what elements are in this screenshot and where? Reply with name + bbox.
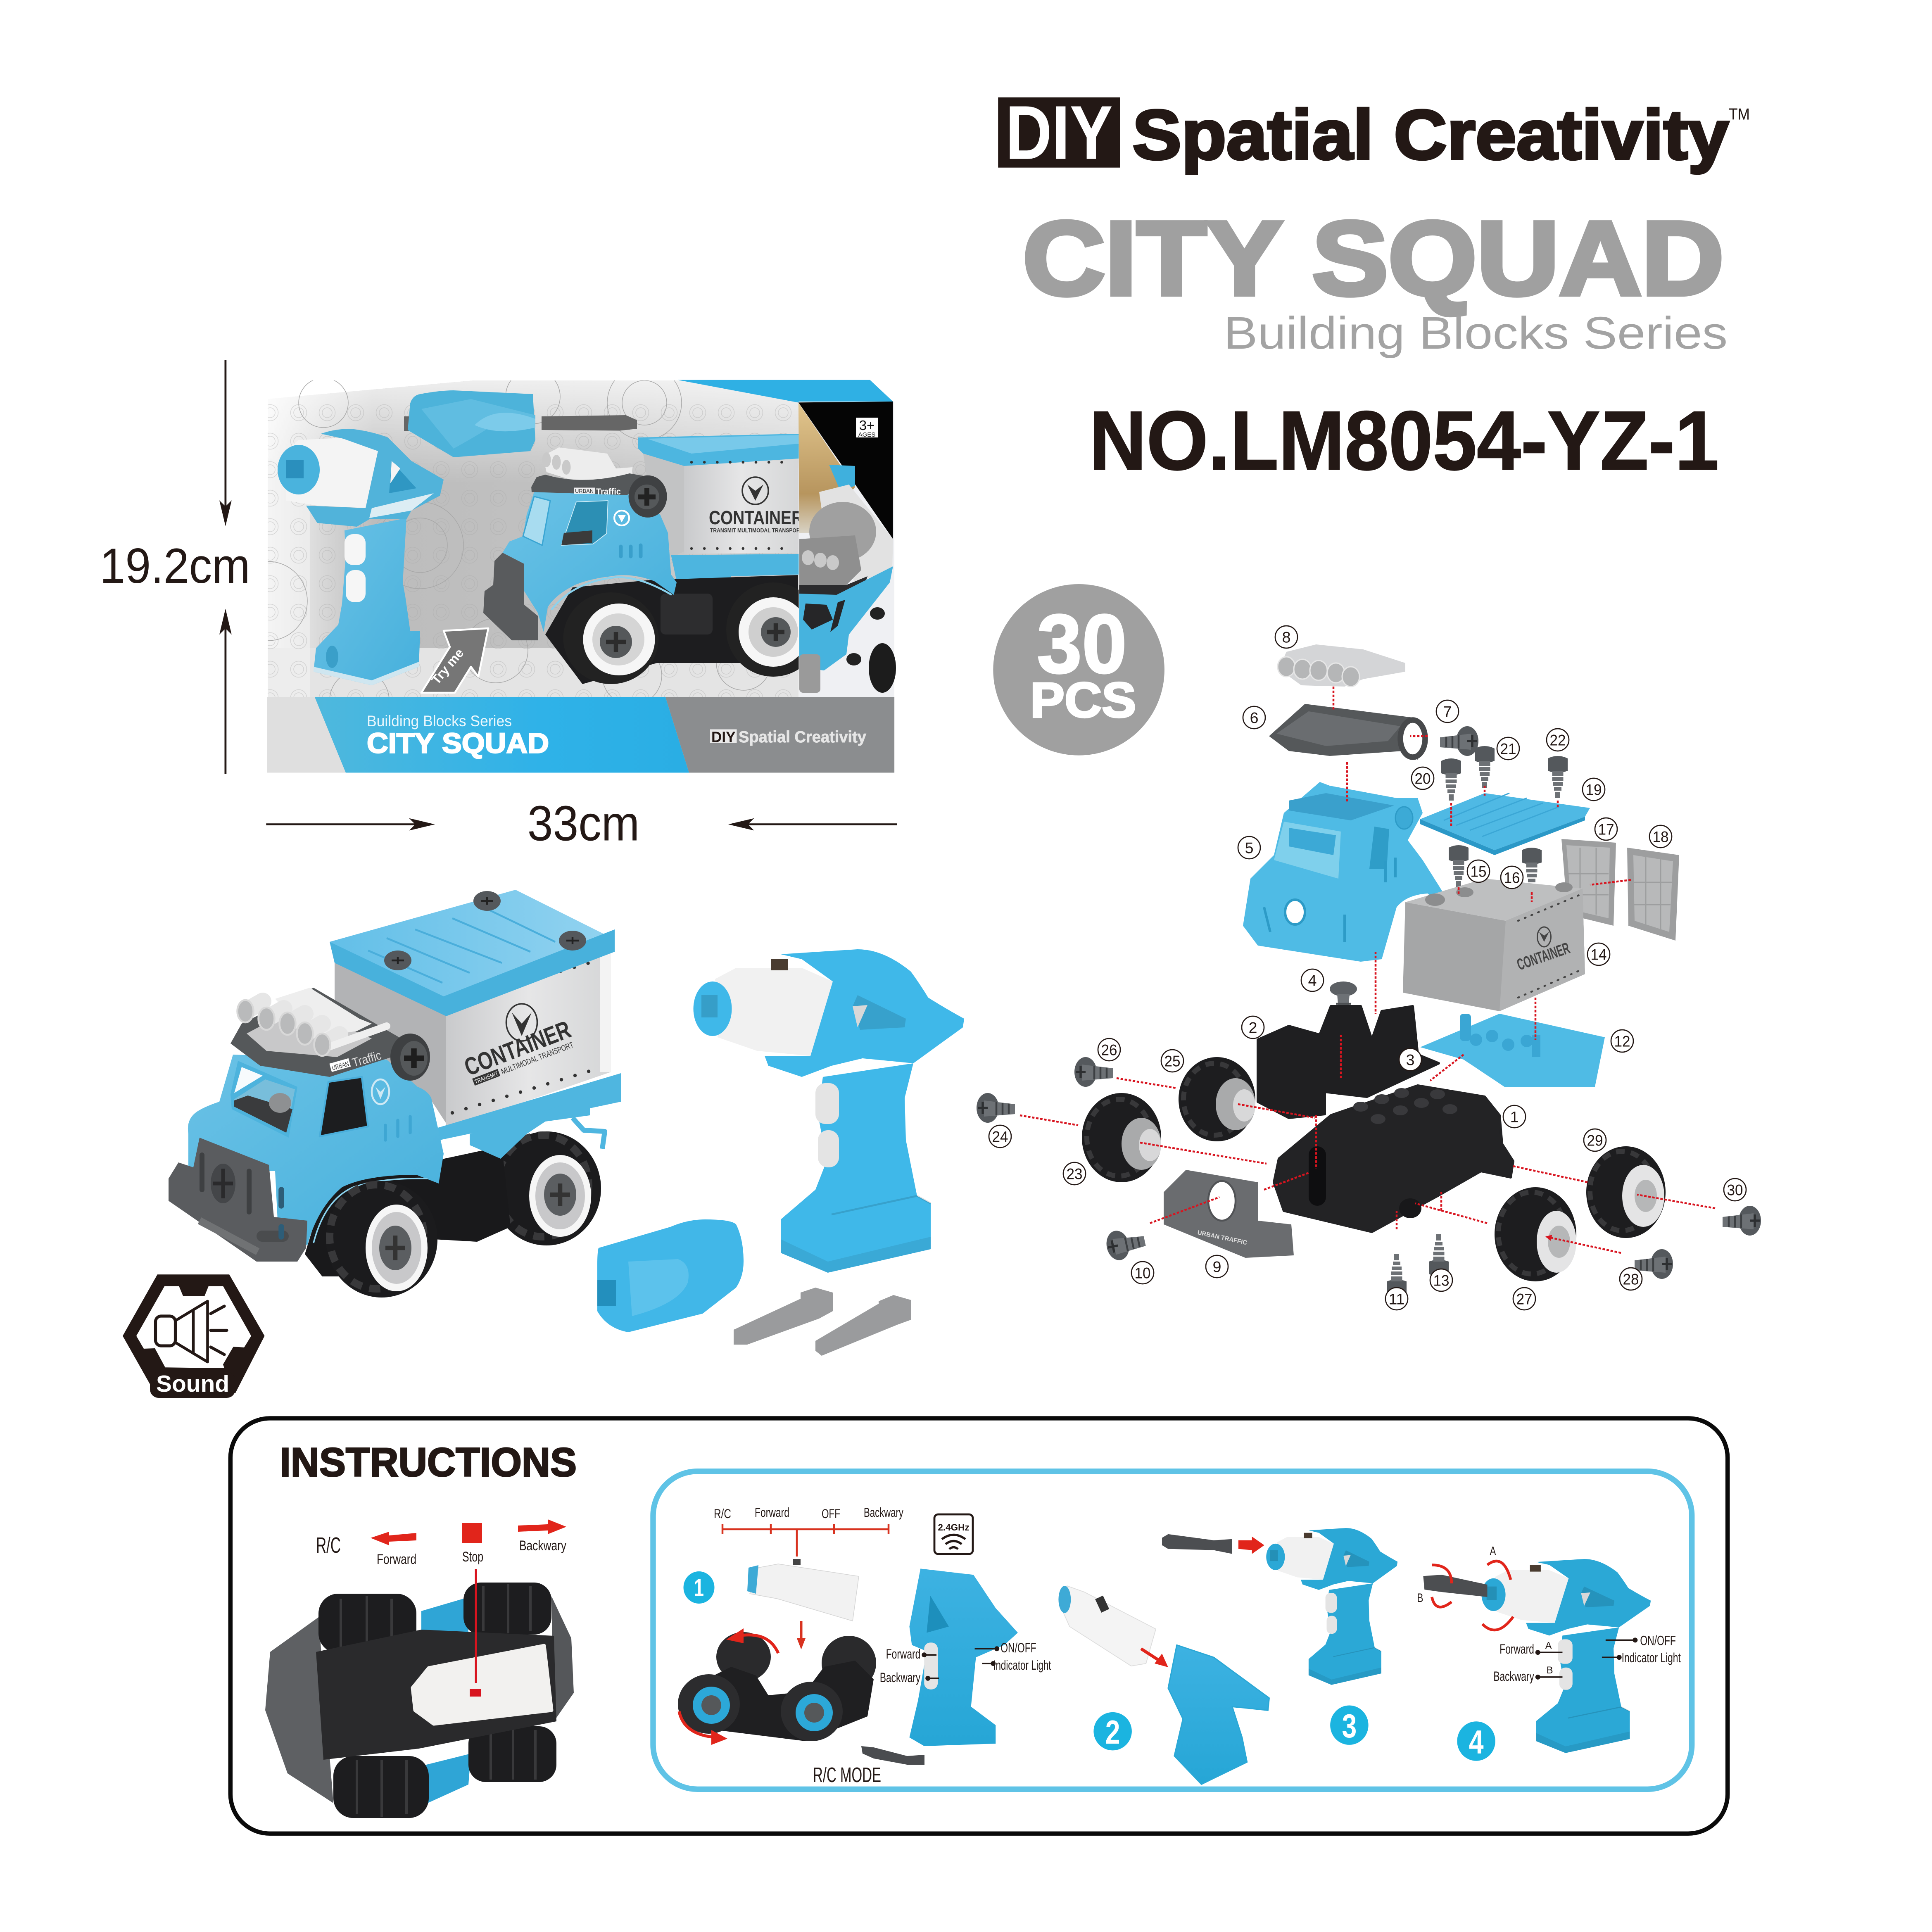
engine pipes	[237, 988, 387, 1056]
age badge: 3+	[859, 418, 875, 433]
step 4 labels: Indicator Light	[1622, 1650, 1681, 1665]
part 11 screw	[1387, 1254, 1407, 1296]
switch selector diagram: OFF	[822, 1506, 840, 1521]
remote labels: ON/OFF	[1000, 1640, 1036, 1655]
step 4: bit and rotation: A	[1490, 1545, 1496, 1558]
sound caption: Sound	[156, 1371, 229, 1397]
part number callouts: 21	[1500, 740, 1516, 758]
part 8 engine	[1278, 644, 1405, 687]
step badge 1: 1	[694, 1574, 704, 1602]
container base	[434, 1073, 621, 1159]
RC car front view	[678, 1632, 876, 1741]
blue box top flap	[678, 380, 893, 402]
part number callouts: 1	[1510, 1108, 1519, 1126]
battery module	[747, 1559, 859, 1621]
step badge 4	[1457, 1721, 1495, 1761]
heading: brand logo	[998, 90, 1750, 176]
part number callouts: 13	[1433, 1272, 1449, 1289]
container logo	[506, 1004, 537, 1041]
part 21 screw	[1475, 746, 1495, 788]
cab	[502, 492, 677, 632]
container right face	[446, 952, 611, 1129]
step badge 3	[1330, 1705, 1369, 1745]
rear wheel	[726, 582, 820, 677]
package toy: truck: URBAN	[575, 488, 594, 494]
part 23 wheel	[1082, 1093, 1161, 1182]
rotation arrows	[679, 1628, 778, 1745]
part 13 screw	[1429, 1234, 1449, 1276]
part 2 seats	[1258, 1006, 1439, 1118]
part number callouts: 11	[1389, 1290, 1404, 1308]
part 22 screw	[1548, 756, 1568, 798]
R/C switch legend: Forward	[377, 1552, 416, 1567]
part 18 panel	[1627, 848, 1679, 941]
headlight studs	[280, 1190, 282, 1237]
remote labels	[880, 1640, 1051, 1685]
part number callouts: 29	[1587, 1132, 1603, 1149]
part number callouts: 17	[1598, 821, 1614, 838]
part number callouts: 2	[1249, 1019, 1257, 1036]
chassis	[545, 575, 798, 684]
remote labels: Indicator Light	[993, 1657, 1051, 1673]
part 4 bolt	[1330, 981, 1357, 1026]
part 28 bolt	[1635, 1249, 1673, 1279]
red pointer line	[475, 1569, 476, 1683]
cross bit	[815, 1295, 911, 1356]
switch selector diagram: Forward	[755, 1505, 789, 1520]
package toy: attachment with screwdriver bit	[404, 390, 637, 457]
series subtitle: Building Blocks Series	[1224, 308, 1728, 359]
drill body without battery	[1168, 1645, 1269, 1784]
cab body	[188, 1055, 444, 1245]
part number callouts: 7	[1443, 703, 1452, 720]
step badge 4: 4	[1469, 1724, 1484, 1761]
visor label: URBAN	[331, 1060, 350, 1072]
container wording	[461, 1015, 577, 1088]
age badge	[856, 418, 878, 438]
black corner panel	[798, 402, 893, 539]
front wheel	[326, 1181, 437, 1298]
step 4 drill	[1481, 1559, 1651, 1753]
package toy: truck: Traffic	[596, 487, 621, 497]
product package box	[228, 366, 896, 772]
badge: 30 PCS: 30	[1037, 597, 1127, 691]
package toy: truck	[483, 434, 820, 684]
DIY logo block: DIY	[1005, 90, 1113, 176]
part number callouts	[989, 626, 1746, 1310]
part number callouts: 9	[1213, 1258, 1221, 1276]
part 15 screw	[1449, 845, 1469, 887]
RC car underside	[265, 1569, 574, 1818]
part 29 wheel	[1586, 1146, 1666, 1238]
part number callouts: 6	[1250, 709, 1258, 727]
remote labels: Forward	[886, 1646, 920, 1661]
visor label: Traffic	[351, 1048, 383, 1070]
part number callouts: 4	[1308, 972, 1317, 989]
part 30 bolt	[1723, 1206, 1761, 1236]
package toy: truck: TRANSMIT MULTIMODAL TRANSPORT	[710, 527, 803, 534]
step 4 labels	[1493, 1633, 1681, 1684]
part 27 wheel	[1495, 1187, 1576, 1281]
visor	[531, 473, 651, 495]
container wording: TRANSMIT	[474, 1070, 499, 1086]
part number callouts: 14	[1590, 946, 1607, 963]
container left face	[335, 960, 450, 1129]
dimension: height: 19.2cm	[100, 539, 250, 594]
panel: steps frame	[653, 1471, 1692, 1789]
container body	[643, 454, 684, 558]
hub bolt	[390, 1034, 430, 1081]
part number callouts: 30	[1727, 1181, 1743, 1199]
grille and bumper	[169, 1138, 307, 1262]
step 4 labels: Forward	[1499, 1641, 1534, 1656]
door logo	[372, 1079, 389, 1104]
package logo: Spatial Creativity	[739, 728, 866, 746]
side window	[320, 1077, 368, 1136]
dimension: width: 33cm	[528, 796, 639, 851]
part 9 bumper: URBAN TRAFFIC	[1197, 1229, 1248, 1246]
package window background	[268, 380, 799, 697]
remote control body	[909, 1568, 1018, 1746]
package toy: truck: CONTAINER	[709, 507, 803, 528]
part 9 bumper	[1164, 1170, 1294, 1258]
age badge: AGES	[858, 431, 875, 438]
package subtitle: Building Blocks Series	[367, 712, 512, 730]
part number callouts: 10	[1134, 1264, 1151, 1282]
cab ribs	[385, 1117, 410, 1140]
part 14 container: CONTAINER	[1515, 939, 1572, 974]
switch selector diagram	[714, 1505, 903, 1557]
RC mode label: R/C MODE	[813, 1763, 881, 1787]
visor label	[329, 1048, 383, 1076]
exploded parts diagram	[977, 626, 1761, 1310]
part number callouts: 8	[1282, 629, 1290, 646]
try me arrow	[421, 628, 488, 693]
dimension: width	[266, 796, 897, 851]
part number callouts: 26	[1101, 1041, 1117, 1059]
panel: instructions	[231, 1418, 1728, 1834]
part 6 visor	[1269, 704, 1425, 760]
badge: 30 PCS: PCS	[1030, 673, 1136, 728]
package logo: DIY	[711, 728, 735, 745]
windshield	[231, 1061, 297, 1138]
badge: 30 PCS	[993, 584, 1164, 756]
screwdriver bit	[861, 1746, 924, 1765]
container roof	[330, 890, 615, 1016]
R/C switch legend: R/C	[316, 1533, 341, 1558]
grille	[483, 553, 538, 640]
rivets	[451, 962, 595, 1113]
part 7 bolt	[1440, 726, 1478, 756]
part number callouts: 19	[1585, 781, 1602, 798]
part 17 panel	[1561, 839, 1616, 926]
step 3 drill	[1266, 1528, 1397, 1685]
part number callouts: 20	[1414, 770, 1431, 787]
exact-pixel/3 coordinate frame	[123, 366, 1761, 1818]
container wording: CONTAINER	[461, 1015, 575, 1081]
red down arrow	[797, 1621, 806, 1649]
part number callouts: 16	[1504, 869, 1520, 886]
step badge 3: 3	[1342, 1708, 1357, 1745]
trademark: TM	[1729, 105, 1750, 123]
model number: NO.LM8054-YZ-1	[1089, 394, 1719, 487]
part number callouts: 3	[1406, 1051, 1414, 1069]
2.4GHz icon	[934, 1514, 973, 1554]
chassis	[305, 1146, 511, 1276]
switch selector diagram: Backwary	[864, 1505, 903, 1520]
engine	[543, 447, 633, 483]
part 10 bolt	[1104, 1225, 1148, 1262]
part 12 chassis plate	[1420, 1014, 1605, 1087]
assembly arrows	[1020, 687, 1715, 1253]
part 1 body	[1274, 1086, 1513, 1232]
package title: CITY SQUAD	[367, 727, 549, 759]
part 26 bolt	[1074, 1057, 1113, 1087]
rear wheel	[492, 1131, 601, 1245]
part number callouts: 5	[1245, 839, 1253, 857]
R/C switch legend	[316, 1519, 567, 1567]
red arrow	[1141, 1649, 1162, 1662]
part number callouts: 18	[1652, 828, 1669, 846]
step 4 labels: Backwary	[1493, 1668, 1534, 1684]
step 4: bit and rotation	[1417, 1545, 1513, 1630]
brand name: Spatial Creativity	[1132, 96, 1729, 174]
R/C switch legend: Stop	[462, 1549, 483, 1565]
step 2: battery insert	[1058, 1586, 1269, 1784]
part 25 wheel	[1179, 1057, 1255, 1141]
part number callouts: 27	[1516, 1290, 1533, 1308]
switch selector diagram: R/C	[714, 1506, 731, 1521]
part number callouts: 25	[1164, 1053, 1181, 1070]
part number callouts: 23	[1067, 1165, 1082, 1183]
dimension: height	[100, 360, 250, 774]
part number callouts: 15	[1471, 863, 1486, 880]
R/C switch legend: Backwary	[519, 1538, 567, 1554]
container wording: MULTIMODAL TRANSPORT	[500, 1040, 575, 1077]
step 4 labels: B	[1547, 1665, 1553, 1676]
assembled truck	[169, 890, 621, 1298]
package bottom strip	[267, 697, 894, 772]
step badge 2: 2	[1105, 1714, 1120, 1751]
part number callouts: 22	[1550, 732, 1566, 749]
package toy: drill	[278, 429, 444, 685]
side art truck	[799, 465, 896, 693]
instructions heading: INSTRUCTIONS	[280, 1440, 577, 1485]
sound icon	[123, 1274, 264, 1398]
step 4 labels: A	[1545, 1640, 1552, 1651]
front wheel	[563, 592, 658, 684]
step badge 2	[1093, 1712, 1132, 1751]
remote labels: Backwary	[880, 1670, 921, 1685]
step 3: bit into drill	[1162, 1534, 1264, 1554]
part number callouts: 28	[1623, 1271, 1639, 1288]
tan wall	[798, 403, 855, 533]
electric drill	[693, 949, 964, 1273]
decorative gears	[268, 380, 768, 697]
step badge 1	[683, 1571, 715, 1604]
part 5 cab	[1243, 782, 1444, 962]
visor	[231, 988, 399, 1077]
part 16 screw	[1522, 848, 1542, 890]
part 24 bolt	[977, 1093, 1015, 1123]
part number callouts: 24	[992, 1128, 1008, 1145]
part 14 container	[1403, 879, 1585, 1011]
step 4 labels: ON/OFF	[1640, 1633, 1676, 1648]
part number callouts: 12	[1614, 1033, 1630, 1050]
main-image coordinate frame	[100, 90, 1750, 1834]
try me arrow: Try me	[428, 646, 467, 687]
rotation arrows A/B	[1432, 1561, 1513, 1630]
part 19 roof plate	[1420, 793, 1590, 855]
2.4GHz icon: 2.4GHz	[938, 1522, 970, 1533]
step 4: bit and rotation: B	[1417, 1591, 1423, 1605]
product title: CITY SQUAD	[1023, 200, 1724, 317]
drill attachment	[597, 1219, 744, 1332]
part 20 screw	[1441, 758, 1461, 801]
box side artwork	[799, 402, 894, 698]
flat bit	[734, 1288, 833, 1345]
